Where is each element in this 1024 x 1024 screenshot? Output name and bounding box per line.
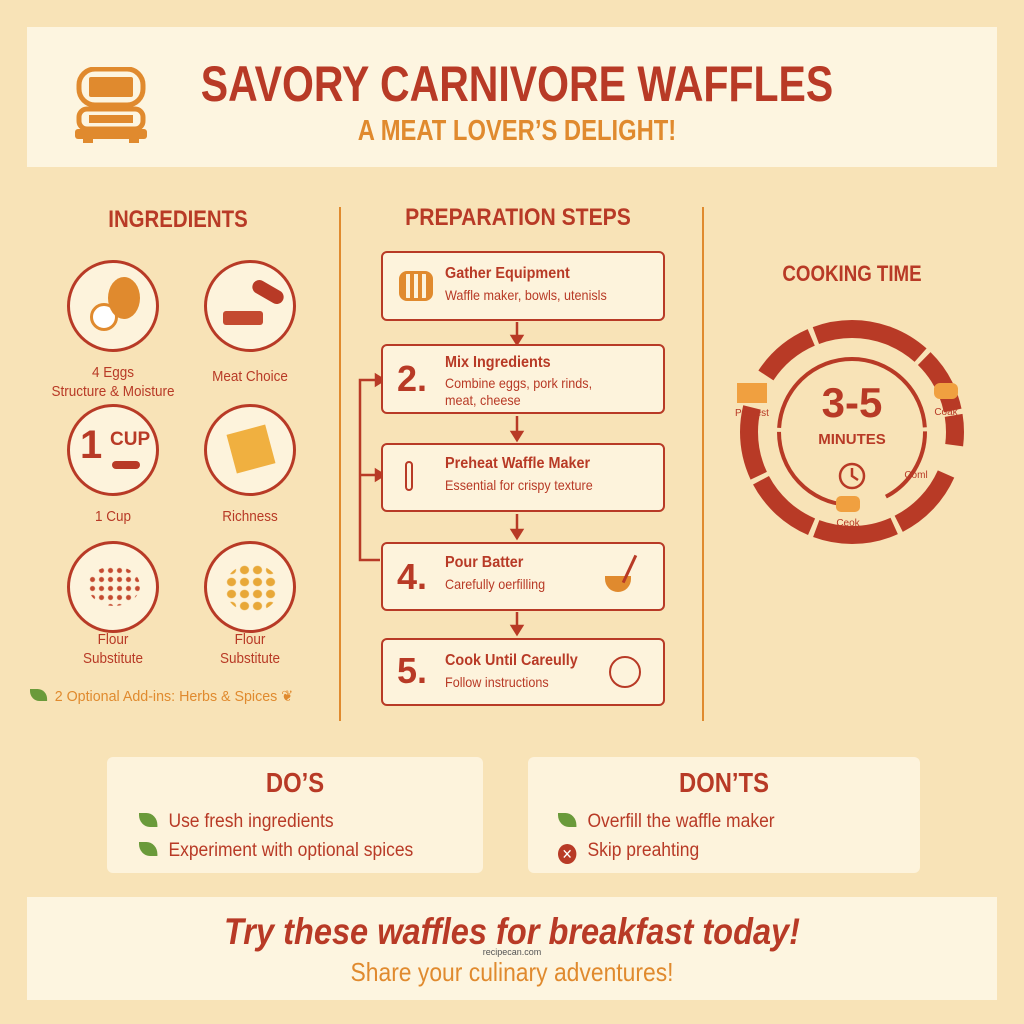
ingredient: meat	[204, 260, 296, 385]
ring chart: Ceok	[836, 518, 861, 529]
step 2: Mix Ingredients	[445, 354, 551, 371]
subtitle: A MEAT LOVER’S DELIGHT!	[358, 115, 676, 147]
step 2: 2.	[397, 358, 427, 399]
step 4	[381, 542, 665, 611]
footer panel	[27, 897, 997, 1000]
step 3	[381, 443, 665, 512]
step 1: Waffle maker, bowls, utenisls	[445, 287, 607, 303]
ring chart: 3-5	[822, 379, 882, 426]
ingredient: flour substitute 1	[67, 541, 159, 667]
step 2: meat, cheese	[445, 392, 521, 408]
ingredient: eggs	[51, 260, 175, 400]
ingredient: flour substitute 2: Flour	[235, 631, 265, 648]
ingredient: 1 cup	[67, 404, 159, 525]
header panel	[27, 27, 997, 167]
ingredient: eggs: 4 Eggs	[92, 364, 134, 381]
step 5: Follow instructions	[445, 674, 549, 690]
step 2: Combine eggs, pork rinds,	[445, 375, 592, 391]
ingredient: cheese: Richness	[222, 508, 278, 525]
step 5: Cook Until Careully	[445, 652, 578, 669]
connector arrows	[358, 322, 524, 636]
step 5: 5.	[397, 650, 427, 691]
heading: do's: DO’S	[266, 767, 324, 798]
step 3: Preheat Waffle Maker	[445, 455, 590, 472]
panel: ingredients	[30, 206, 296, 705]
title: SAVORY CARNIVORE WAFFLES	[201, 56, 833, 112]
ring chart: Proitest	[735, 408, 769, 419]
ingredient: flour substitute 1: Flour	[98, 631, 128, 648]
subtext: Share your culinary adventures!	[350, 957, 674, 987]
heading: ingredients: INGREDIENTS	[108, 206, 248, 233]
ring chart: Coml	[904, 470, 928, 481]
ingredient: flour substitute 2: Substitute	[220, 650, 280, 667]
panel: don'ts	[528, 757, 920, 873]
footer panel: recipecan.com	[483, 947, 541, 957]
panel: don'ts: Overfill the waffle maker	[587, 811, 775, 832]
ingredient: cheese	[204, 404, 296, 525]
panel: cooking time	[735, 261, 964, 544]
panel: don'ts: Skip preahting	[587, 840, 699, 861]
heading: don'ts: DON’TS	[679, 767, 769, 798]
step 5	[381, 638, 665, 706]
step 4: 4.	[397, 556, 427, 597]
panel: do's	[107, 757, 483, 873]
heading: preparation steps: PREPARATION STEPS	[405, 204, 631, 231]
step 4: Pour Batter	[445, 554, 523, 571]
divider lines	[339, 207, 341, 721]
heading: cooking time: COOKING TIME	[782, 261, 922, 286]
panel: do's: Experiment with optional spices	[168, 840, 413, 861]
ring chart	[735, 320, 964, 544]
ring chart: Coak	[934, 407, 959, 418]
call to action: Try these waffles for breakfast today!	[224, 911, 800, 952]
ingredient: 1 cup: 1	[80, 423, 102, 467]
panel: don'ts: ✕	[562, 846, 573, 862]
step 2	[381, 344, 665, 414]
optional add-ins: 2 Optional Add-ins: Herbs & Spices ❦	[55, 688, 293, 705]
step 3: Essential for crispy texture	[445, 477, 593, 493]
ring chart: MINUTES	[818, 431, 886, 448]
ingredient: flour substitute 2	[204, 541, 296, 667]
ingredient: eggs: Structure & Moisture	[51, 383, 175, 400]
step 4: Carefully oerfilling	[445, 576, 545, 592]
step 1: Gather Equipment	[445, 265, 570, 282]
panel: do's: Use fresh ingredients	[168, 811, 334, 832]
ingredient: flour substitute 1: Substitute	[83, 650, 143, 667]
ingredient: 1 cup: CUP	[110, 429, 150, 450]
icon: waffle maker	[75, 67, 147, 143]
ingredient: meat: Meat Choice	[212, 368, 288, 385]
ingredient: 1 cup: 1 Cup	[95, 508, 131, 525]
step 1	[381, 251, 665, 321]
